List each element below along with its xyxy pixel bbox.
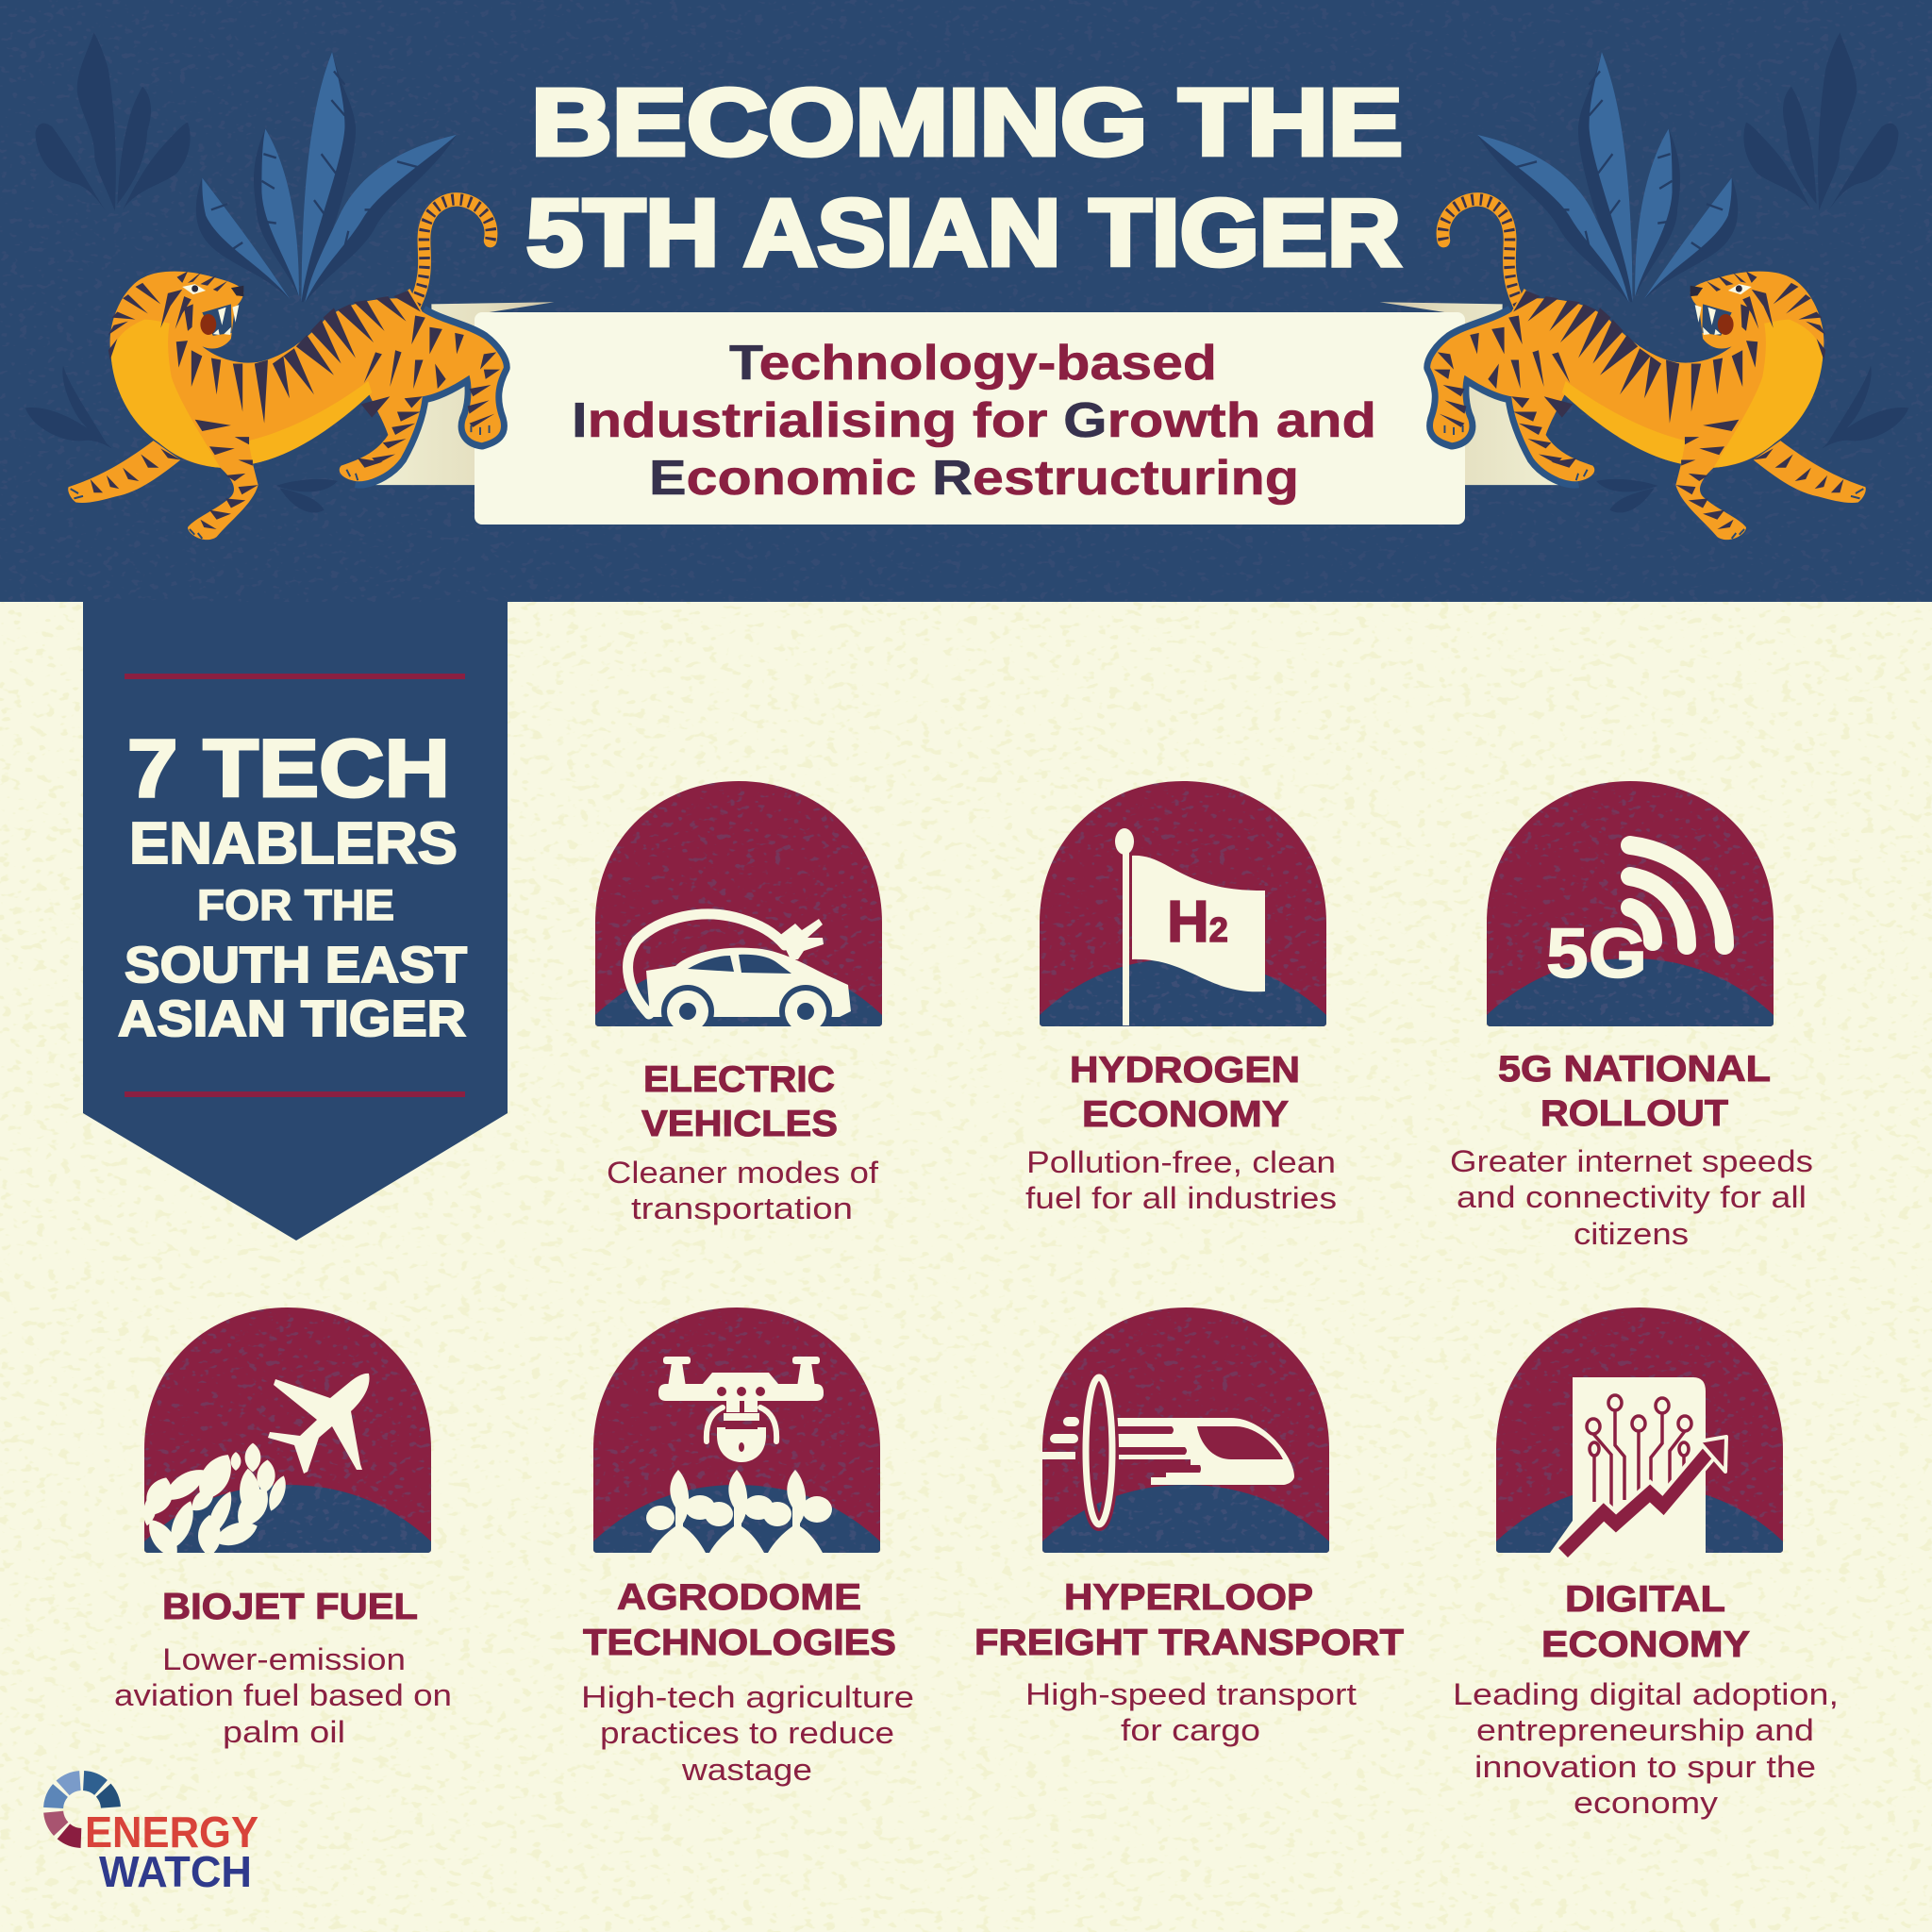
heading: TECHNOLOGIES (583, 1623, 896, 1663)
description: for cargo (1121, 1713, 1260, 1747)
ribbon line: asian tiger: ASIAN TIGER (118, 991, 466, 1047)
description: entrepreneurship and (1476, 1713, 1814, 1747)
heading (1498, 1049, 1771, 1134)
heading: BIOJET FUEL (162, 1587, 418, 1627)
subtitle banner (475, 312, 1465, 525)
icon: digital chart (1496, 1307, 1783, 1553)
description (1450, 1144, 1813, 1251)
heading: AGRODOME (617, 1577, 861, 1618)
subtitle line 2: Industrialising for Growth and (572, 393, 1376, 448)
description: aviation fuel based on (114, 1678, 452, 1712)
heading: DIGITAL (1565, 1579, 1725, 1620)
description: wastage (681, 1753, 812, 1787)
heading (974, 1577, 1404, 1663)
scroll fold left (375, 302, 554, 485)
description: Greater internet speeds (1450, 1144, 1813, 1178)
heading: 5G NATIONAL (1498, 1049, 1771, 1090)
description: transportation (631, 1191, 853, 1225)
description: and connectivity for all (1457, 1180, 1807, 1214)
icon: hydrogen flag (1040, 781, 1326, 1026)
heading (583, 1577, 896, 1663)
scroll fold right (1380, 302, 1558, 485)
ribbon line: 7 tech: 7 TECH (127, 724, 450, 814)
description (1453, 1677, 1839, 1820)
tiger stripes (91, 272, 500, 529)
left tiger and foliage (25, 33, 504, 540)
panel: agrodome technologies (581, 1307, 914, 1787)
heading: ROLLOUT (1541, 1093, 1728, 1134)
tiger face (182, 284, 243, 336)
foliage: blue plant (196, 52, 457, 302)
heading: HYPERLOOP (1064, 1577, 1313, 1618)
icon: plane and leaves (141, 1307, 431, 1563)
description: citizens (1574, 1217, 1689, 1251)
panel: hydrogen economy (1025, 781, 1337, 1215)
description: Lower-emission (162, 1642, 406, 1676)
header speckle (0, 0, 1932, 602)
description (114, 1642, 452, 1749)
logo wordmark: watch: WATCH (99, 1847, 252, 1896)
panel: 5G national rollout (1450, 781, 1813, 1251)
description: palm oil (223, 1715, 345, 1749)
tiger body (110, 272, 504, 540)
right tiger and foliage (mirror) (1430, 33, 1908, 540)
heading: ELECTRIC (643, 1059, 835, 1100)
ribbon line: for the: FOR THE (197, 881, 394, 929)
icon: electric car (595, 781, 882, 1038)
heading: FREIGHT TRANSPORT (974, 1623, 1404, 1663)
title line 2: 5TH ASIAN TIGER (526, 180, 1401, 286)
panel: hyperloop freight transport (974, 1307, 1404, 1747)
heading (1541, 1579, 1750, 1665)
subtitle line 3: Economic Restructuring (649, 451, 1299, 506)
tiger tail (415, 199, 491, 304)
ribbon line: south east: SOUTH EAST (125, 937, 467, 993)
description: economy (1574, 1786, 1718, 1820)
description: fuel for all industries (1025, 1181, 1337, 1215)
panel: biojet fuel (114, 1307, 452, 1749)
heading: ECONOMY (1541, 1624, 1750, 1665)
tiger toes (71, 425, 490, 539)
ribbon: 7 tech enablers (83, 602, 508, 1241)
description (1025, 1677, 1357, 1747)
description (581, 1680, 914, 1787)
tiger yellow chest and belly (111, 320, 372, 468)
description: Leading digital adoption, (1453, 1677, 1839, 1711)
heading: VEHICLES (641, 1104, 838, 1144)
heading: ECONOMY (1082, 1094, 1289, 1135)
panel: digital economy (1453, 1307, 1839, 1820)
description: innovation to spur the (1474, 1750, 1816, 1784)
ribbon line: enablers: ENABLERS (129, 811, 458, 876)
subtitle line 1: Technology-based (729, 336, 1217, 391)
foliage: dark plant (25, 33, 338, 512)
logo: Energy Watch (42, 1769, 258, 1896)
tiger hind leg (68, 441, 180, 503)
heading: HYDROGEN (1070, 1050, 1300, 1091)
icon: drone and sprouts (593, 1307, 880, 1553)
description: High-speed transport (1025, 1677, 1357, 1711)
description: practices to reduce (600, 1716, 894, 1750)
panel: electric vehicles (595, 781, 882, 1225)
header band (0, 0, 1932, 602)
tiger outline (356, 311, 504, 481)
heading (641, 1059, 838, 1144)
background speckle (0, 602, 1932, 1932)
description (607, 1156, 878, 1225)
icon: 5G signal (1487, 781, 1774, 1026)
title line 1: BECOMING THE (531, 70, 1403, 175)
description: Pollution-free, clean (1026, 1145, 1336, 1179)
heading (1070, 1050, 1300, 1135)
logo ring (42, 1769, 123, 1850)
icon: hyperloop train (1042, 1307, 1329, 1553)
description (1025, 1145, 1337, 1215)
icon: 5G signal: 5G (1546, 914, 1647, 992)
logo wordmark: energy: ENERGY (85, 1807, 258, 1857)
icon: hydrogen flag: H2 (1167, 890, 1228, 955)
subtitle text (572, 336, 1376, 506)
description: High-tech agriculture (581, 1680, 914, 1714)
description: Cleaner modes of (607, 1156, 878, 1190)
main title (526, 70, 1403, 286)
